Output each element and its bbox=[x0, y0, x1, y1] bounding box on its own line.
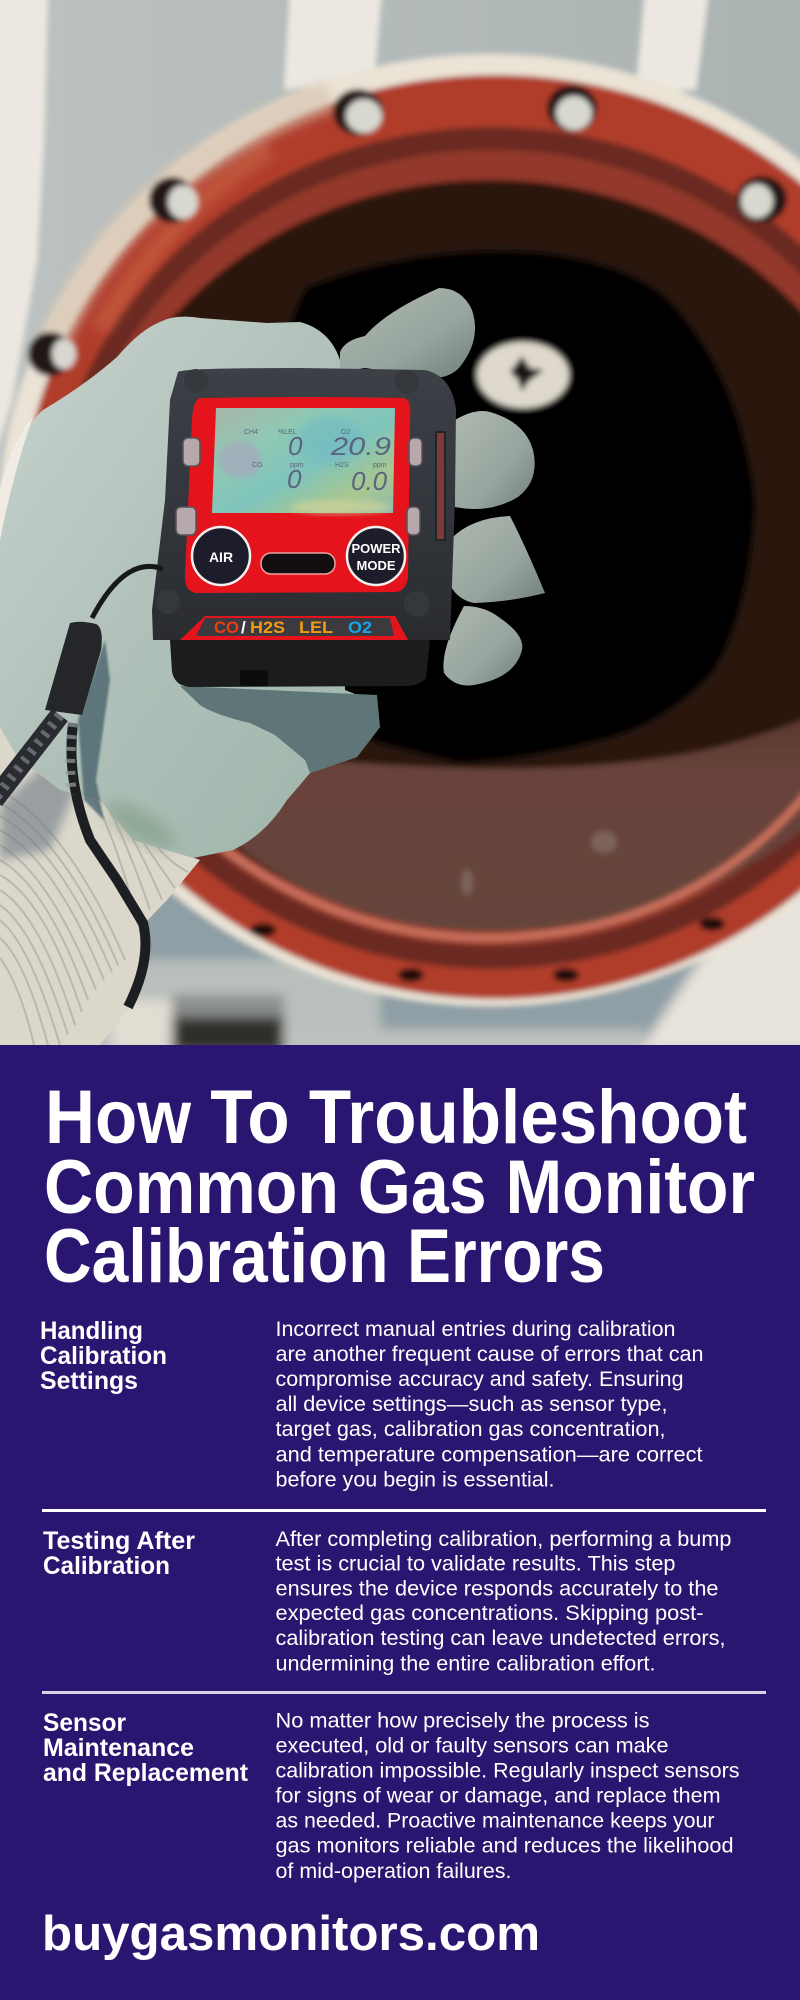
body: testing after calibration bbox=[276, 1527, 732, 1676]
title bbox=[44, 1075, 755, 1299]
right side vent bbox=[436, 432, 445, 540]
heading: sensor maintenance and replacement: and Replacement bbox=[43, 1759, 249, 1787]
photo: gloved hand holding gas monitor in front of a flange opening bbox=[0, 0, 800, 1045]
LCD readings: CH4 bbox=[244, 429, 258, 436]
section: handling calibration settings bbox=[40, 1317, 704, 1492]
faded paint on upper-left of rim bbox=[45, 95, 330, 360]
base latch bbox=[240, 670, 268, 686]
body: sensor maintenance and replacement: executed, old or faulty sensors can make bbox=[276, 1734, 668, 1758]
AIR button: AIR bbox=[209, 549, 233, 565]
heading: handling calibration settings: Handling bbox=[40, 1317, 143, 1345]
lanyard shadow on glove bbox=[78, 640, 110, 820]
cuff: knit wrist bbox=[0, 720, 200, 1045]
body: handling calibration settings: compromise accuracy and safety. Ensuring bbox=[276, 1367, 684, 1391]
heading: testing after calibration: Calibration bbox=[43, 1552, 170, 1580]
body: handling calibration settings: target gas, calibration gas concentration, bbox=[276, 1417, 666, 1441]
section: testing after calibration bbox=[43, 1527, 732, 1676]
white fitting inside opening bbox=[477, 342, 569, 408]
body: sensor maintenance and replacement: for signs of wear or damage, and replace them bbox=[276, 1784, 720, 1808]
LCD readings: 20.9 bbox=[330, 433, 391, 461]
heading: sensor maintenance and replacement bbox=[43, 1709, 249, 1787]
LCD readings: 0 bbox=[287, 464, 302, 494]
body: handling calibration settings: are another frequent cause of errors that can bbox=[276, 1342, 704, 1366]
bottom wall area bbox=[110, 810, 800, 1052]
corner bumps bbox=[156, 369, 430, 617]
body: sensor maintenance and replacement: calibration impossible. Regularly inspect sensors bbox=[276, 1758, 740, 1782]
body: handling calibration settings: before you begin is essential. bbox=[276, 1468, 554, 1492]
body: testing after calibration: test is crucial to validate results. This step bbox=[276, 1552, 676, 1576]
wall stripes bbox=[0, 0, 709, 470]
body: testing after calibration: After completing calibration, performing a bump bbox=[276, 1527, 732, 1551]
red faceplate bbox=[185, 397, 410, 593]
heading: handling calibration settings: Settings bbox=[40, 1367, 138, 1395]
body: testing after calibration: expected gas concentrations. Skipping post- bbox=[276, 1601, 704, 1625]
POWER MODE button bbox=[347, 527, 405, 585]
flange opening bbox=[80, 180, 800, 931]
flange rim layers bbox=[0, 54, 800, 1006]
sensor label strip: O2 bbox=[348, 618, 372, 637]
heading: testing after calibration: Testing After bbox=[43, 1527, 195, 1555]
gas monitor bbox=[152, 368, 456, 687]
lanyard bbox=[0, 566, 163, 1007]
body: testing after calibration: ensures the device responds accurately to the bbox=[276, 1576, 718, 1600]
LCD readings: CO bbox=[252, 462, 263, 469]
LCD readings bbox=[244, 429, 391, 496]
body: handling calibration settings: and temperature compensation—are correct bbox=[276, 1442, 703, 1466]
black interior bbox=[268, 251, 755, 763]
glove: white edge at left bbox=[0, 417, 33, 540]
LCD screen bbox=[212, 408, 395, 514]
body: testing after calibration: calibration testing can leave undetected errors, bbox=[276, 1626, 726, 1650]
heading: handling calibration settings: Calibration bbox=[40, 1342, 167, 1370]
slot bbox=[261, 553, 335, 574]
glove: green shading low on palm bbox=[98, 793, 182, 857]
LCD readings: %LEL bbox=[278, 429, 297, 436]
section: sensor maintenance and replacement bbox=[43, 1708, 740, 1883]
website url: buygasmonitors.com bbox=[42, 1907, 540, 1961]
sensor label strip: / bbox=[241, 618, 246, 637]
sensor label strip: LEL bbox=[299, 618, 333, 637]
LCD readings: ppm bbox=[290, 462, 304, 469]
heading: testing after calibration bbox=[43, 1527, 195, 1580]
sensor label strip bbox=[180, 616, 408, 640]
glove: shadow under device bbox=[180, 686, 380, 773]
body: handling calibration settings: Incorrect manual entries during calibration bbox=[276, 1317, 676, 1341]
LCD readings: O2 bbox=[341, 429, 350, 436]
blurred background: wall and flange bbox=[0, 0, 800, 1055]
AIR button bbox=[192, 527, 250, 585]
lower rim bright band bbox=[200, 790, 800, 938]
body: sensor maintenance and replacement: No matter how precisely the process is bbox=[276, 1708, 650, 1732]
heading: sensor maintenance and replacement: Maintenance bbox=[43, 1734, 194, 1762]
title: Calibration Errors bbox=[44, 1214, 605, 1299]
sensor label strip: H2S bbox=[250, 618, 285, 637]
POWER MODE button: POWER bbox=[351, 541, 401, 556]
heading: sensor maintenance and replacement: Sensor bbox=[43, 1709, 126, 1737]
title: How To Troubleshoot bbox=[45, 1075, 747, 1160]
body: handling calibration settings bbox=[276, 1317, 704, 1492]
text panel bbox=[40, 1075, 766, 1961]
body: sensor maintenance and replacement bbox=[276, 1708, 740, 1883]
LCD readings: H2S bbox=[335, 462, 349, 469]
LCD readings: 0.0 bbox=[351, 466, 388, 496]
LCD readings: 0 bbox=[288, 431, 303, 461]
glove: palm bbox=[0, 317, 380, 858]
glove fingers bbox=[340, 288, 545, 686]
body: sensor maintenance and replacement: of mid-operation failures. bbox=[276, 1859, 512, 1883]
sensor label strip: CO bbox=[214, 618, 239, 637]
heading: handling calibration settings bbox=[40, 1317, 167, 1395]
POWER MODE button: MODE bbox=[356, 558, 396, 573]
LCD readings: ppm bbox=[373, 462, 387, 469]
bolt holes bbox=[28, 85, 787, 982]
lanyard clip bbox=[45, 622, 102, 715]
body: sensor maintenance and replacement: gas monitors reliable and reduces the likelihood bbox=[276, 1834, 734, 1858]
side windows bbox=[176, 438, 422, 535]
body: handling calibration settings: all device settings—such as sensor type, bbox=[276, 1392, 668, 1416]
body: testing after calibration: undermining the entire calibration effort. bbox=[276, 1652, 656, 1676]
body: sensor maintenance and replacement: as needed. Proactive maintenance keeps your bbox=[276, 1808, 714, 1832]
floor highlights bbox=[461, 831, 617, 895]
monitor base bbox=[170, 640, 430, 687]
monitor rubber housing bbox=[152, 368, 456, 640]
